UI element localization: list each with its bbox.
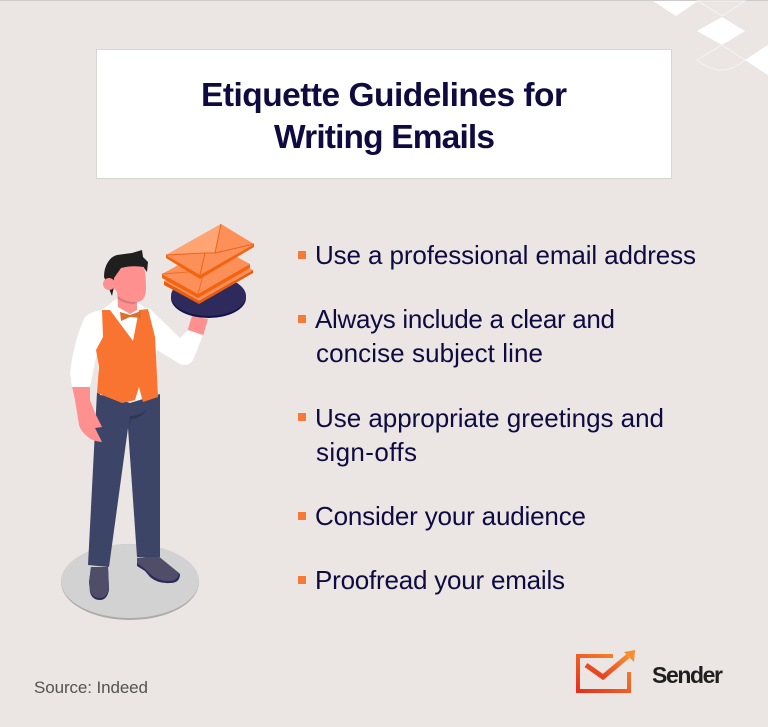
face — [103, 266, 146, 304]
item 4: Consider your audience — [315, 501, 586, 531]
hair — [104, 250, 148, 296]
shoes — [89, 556, 180, 600]
bottom envelope — [164, 252, 253, 304]
logo icon — [578, 650, 635, 691]
envelopes — [162, 224, 254, 304]
item 3: Use appropriate greetings and — [315, 403, 664, 433]
source note: Source: Indeed — [34, 678, 148, 697]
title panel — [96, 50, 672, 178]
bullet list — [298, 240, 696, 595]
item 1: Use a professional email address — [315, 240, 696, 270]
logo: Sender — [578, 650, 723, 691]
title: Writing Emails — [274, 119, 495, 156]
item 3: sign-offs — [316, 437, 417, 467]
platform — [61, 544, 199, 620]
item 3 — [298, 403, 664, 467]
tray — [171, 276, 246, 318]
logo wordmark: Sender — [652, 662, 723, 688]
illustration: waiter holding tray of envelopes — [61, 224, 254, 620]
top envelope — [166, 224, 254, 279]
title: Etiquette Guidelines for — [201, 77, 567, 114]
vest — [96, 309, 158, 403]
right hand — [187, 316, 208, 336]
trousers — [88, 392, 160, 567]
decorative diamonds — [653, 1, 768, 75]
item 2: Always include a clear and — [315, 304, 615, 334]
shirt — [70, 298, 203, 400]
item 2: concise subject line — [316, 338, 543, 368]
middle envelope — [162, 245, 250, 298]
left hand and arm — [72, 386, 102, 442]
item 2 — [298, 304, 615, 368]
item 5: Proofread your emails — [315, 565, 565, 595]
neck — [117, 290, 137, 314]
bow tie — [120, 311, 141, 321]
